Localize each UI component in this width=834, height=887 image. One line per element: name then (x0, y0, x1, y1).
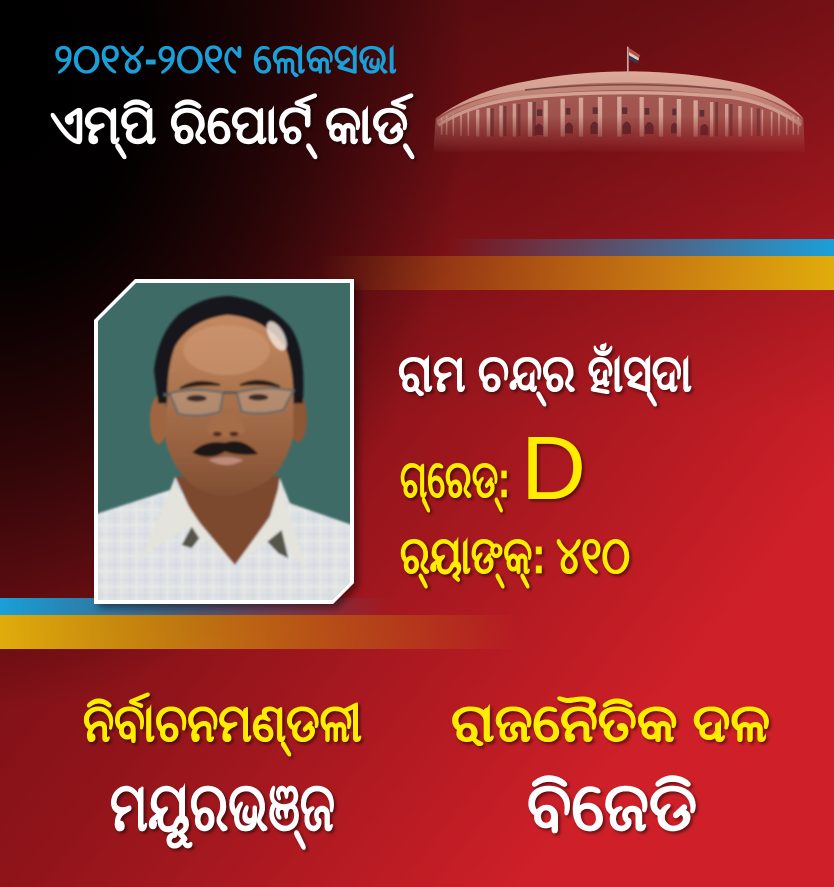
eyebrows (180, 381, 280, 388)
moustache (192, 441, 258, 457)
heading: term: ୨୦୧୪-୨୦୧୯ ଲୋକସଭା (54, 35, 397, 82)
lips (208, 457, 243, 465)
hair (154, 296, 303, 403)
grade value: D (521, 419, 586, 519)
MP name: ରାମ ଚନ୍ଦ୍ର ହାଁସ୍‌ଦା (398, 342, 692, 406)
constituency value: ମୟୂରଭଞ୍ଜ (110, 769, 335, 851)
plinth (433, 136, 805, 152)
bottom decorative stripes (0, 598, 520, 649)
party value: ବିଜେଡି (527, 769, 697, 845)
shirt (93, 477, 357, 607)
face (165, 315, 293, 496)
column shadows (492, 102, 758, 136)
eyes (187, 395, 207, 402)
illustration: parliament building (433, 47, 805, 152)
cornice (438, 93, 801, 125)
constituency label: ନିର୍ବାଚନମଣ୍ଡଳୀ (83, 692, 362, 757)
party label: ରାଜନୈତିକ ଦଳ (451, 694, 770, 753)
flag (627, 47, 629, 77)
forehead highlight (183, 325, 270, 375)
ears (150, 396, 167, 444)
arched windows (535, 107, 708, 135)
rank: ର୍‍ୟାଙ୍କ୍: ୪୧୦ (400, 527, 630, 588)
glasses (169, 388, 293, 416)
grade label: ଗ୍ରେଡ୍: (400, 451, 510, 512)
columns (442, 108, 798, 136)
photo of the MP (93, 279, 357, 607)
neck (175, 477, 280, 565)
nose (222, 432, 228, 436)
top decorative stripes (320, 239, 834, 290)
collar (143, 483, 233, 563)
heading: MP report card: ଏମ୍‌ପି ରିପୋର୍ଟ୍ କାର୍ଡ୍ (50, 93, 414, 159)
building body (433, 71, 805, 152)
